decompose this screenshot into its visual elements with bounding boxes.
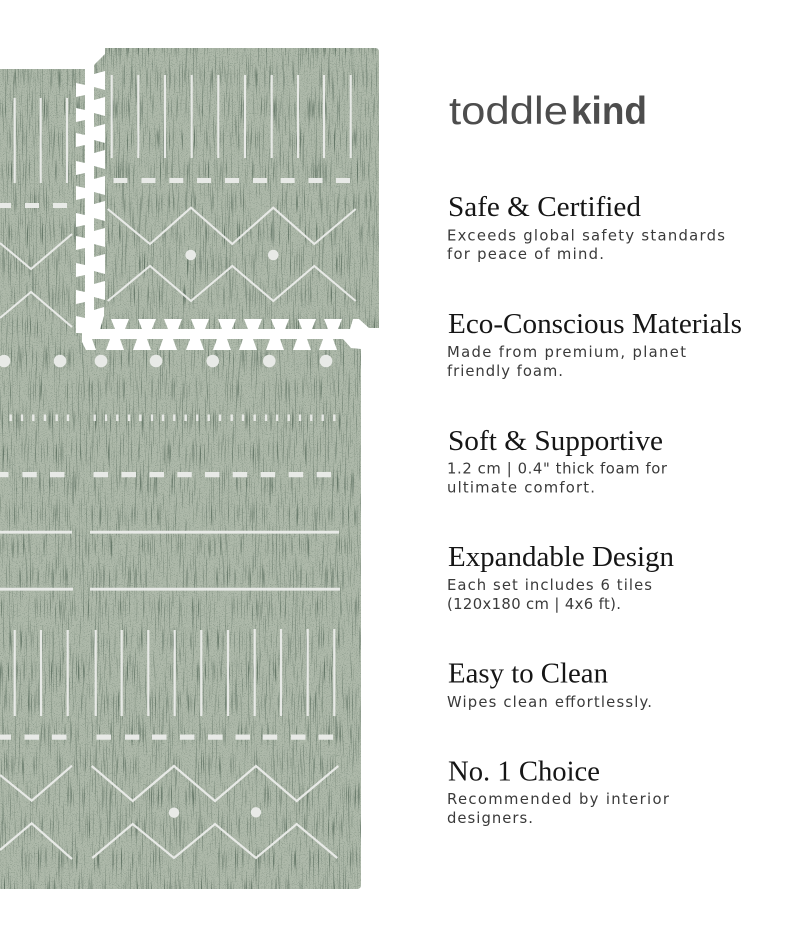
lower vertical lines	[15, 629, 334, 716]
description: designers.	[447, 810, 533, 827]
row of dots	[0, 355, 332, 367]
row of tiny ticks	[11, 414, 334, 421]
upper tile dashes	[0, 178, 350, 208]
upper tile vertical lines	[15, 75, 351, 183]
lower dots	[169, 808, 179, 818]
middle dashes	[0, 472, 331, 477]
description: friendly foam.	[447, 363, 563, 380]
heading: Expandable Design	[448, 541, 674, 573]
description: Made from premium, planet	[447, 344, 686, 361]
feature: soft and supportive	[447, 425, 668, 496]
description: Exceeds global safety standards	[447, 228, 725, 244]
heading: Soft & Supportive	[448, 425, 663, 457]
long horizontal lines	[0, 531, 340, 591]
description: ultimate comfort.	[447, 480, 595, 496]
mat surface with woven texture	[0, 40, 390, 900]
upper tile chevrons	[0, 208, 356, 327]
description: for peace of mind.	[447, 246, 604, 263]
feature: safe and certified	[447, 191, 725, 263]
upper tile dots	[185, 250, 196, 260]
description: Each set includes 6 tiles	[447, 577, 652, 594]
heading: No. 1 Choice	[448, 756, 600, 788]
mat pattern: lines, dashes, chevrons and dots	[0, 75, 356, 859]
heading: Eco-Conscious Materials	[448, 308, 742, 340]
description: (120x180 cm | 4x6 ft).	[447, 596, 621, 613]
feature: expandable design	[447, 541, 674, 613]
feature: easy to clean	[447, 658, 652, 711]
brand logo: kind	[571, 90, 647, 133]
heading: Easy to Clean	[448, 658, 608, 690]
feature: eco-conscious materials	[447, 308, 742, 380]
heading: Safe & Certified	[448, 191, 641, 223]
lower chevrons	[0, 766, 338, 859]
lower dashes	[0, 734, 333, 740]
description: Wipes clean effortlessly.	[447, 694, 652, 711]
play mat	[0, 40, 390, 900]
description: 1.2 cm | 0.4" thick foam for	[447, 460, 668, 478]
brand logo: toddle	[449, 90, 568, 133]
feature: no. 1 choice	[447, 756, 670, 827]
interlocking white gaps between tiles	[76, 69, 380, 350]
description: Recommended by interior	[447, 791, 670, 808]
